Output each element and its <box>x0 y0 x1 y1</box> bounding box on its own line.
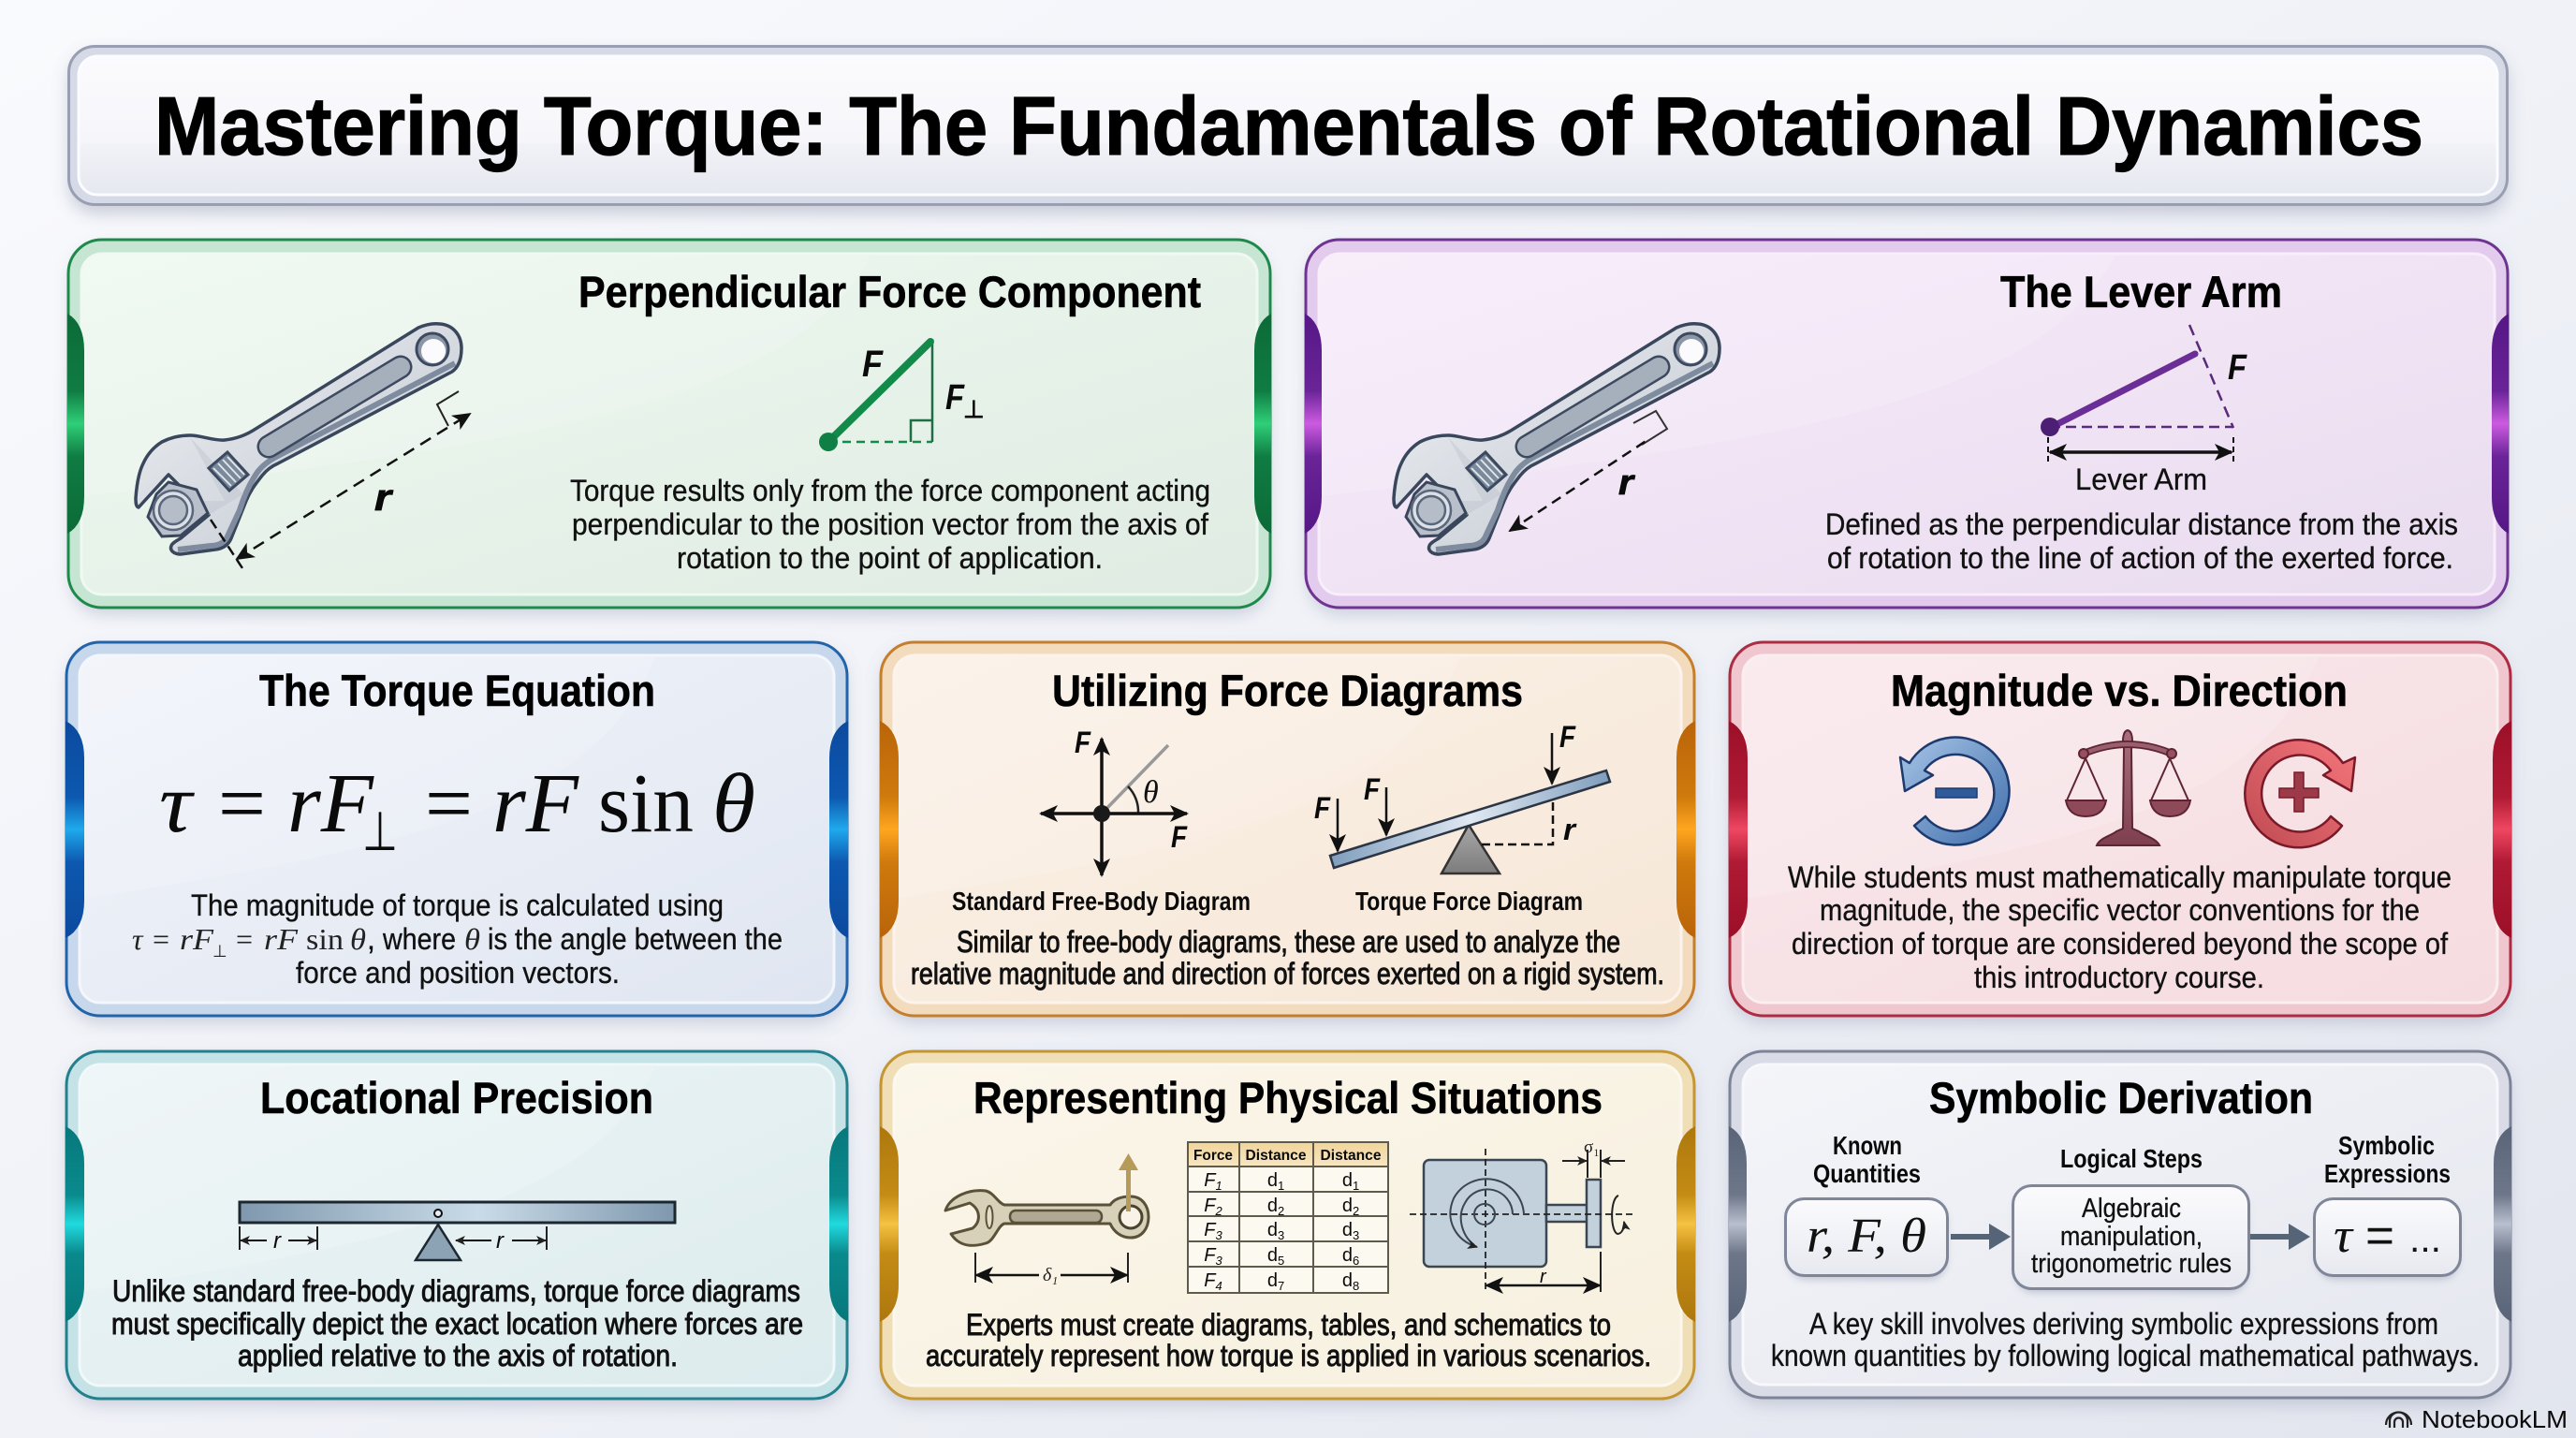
panel: the torque equation <box>66 642 848 1022</box>
table: 1 <box>1353 1179 1359 1193</box>
description <box>1825 507 2458 575</box>
icon: counterclockwise minus <box>1900 738 2010 845</box>
arrow <box>2250 1224 2310 1250</box>
flow: logical steps: trigonometric rules <box>2031 1249 2232 1279</box>
description <box>570 474 1210 575</box>
flow: known quantities: Known <box>1833 1131 1902 1160</box>
flow: symbolic expressions: Symbolic <box>2338 1131 2435 1160</box>
description: , <box>367 922 375 956</box>
flow: logical steps: Algebraic <box>2082 1194 2181 1224</box>
description: While students must mathematically manipulate torque <box>1788 860 2452 894</box>
description: = <box>236 922 253 956</box>
description: Defined as the perpendicular distance from the axis <box>1825 507 2458 541</box>
diagram: force triangle <box>819 339 985 451</box>
table: F <box>1204 1270 1215 1291</box>
icon: wrench with r: r <box>374 477 394 519</box>
table: 3 <box>1278 1228 1284 1242</box>
schematic: rotating shaft: r <box>1540 1267 1547 1287</box>
flow: symbolic expressions: = <box>2365 1209 2394 1263</box>
equation: ⊥ <box>362 801 398 862</box>
description: θ <box>464 922 480 956</box>
diagram: standard free-body: θ <box>1143 775 1159 810</box>
equation: = <box>425 757 473 850</box>
flow: logical steps: Logical Steps <box>2060 1144 2203 1173</box>
description: relative magnitude and direction of forces exerted on a rigid system. <box>911 957 1664 990</box>
diagram: torque force seesaw <box>1314 720 1610 916</box>
flow: known quantities <box>1786 1131 1947 1280</box>
diagram: lever arm: F <box>2228 348 2248 388</box>
title: Mastering Torque: The Fundamentals of Rotational Dynamics <box>154 80 2423 172</box>
panel: magnitude vs direction <box>1729 642 2511 1022</box>
diagram: force triangle: ⊥ <box>963 395 985 423</box>
table: 8 <box>1353 1279 1359 1293</box>
table: F <box>1204 1245 1215 1266</box>
description: rF <box>180 922 214 956</box>
table: 3 <box>1215 1254 1222 1268</box>
table: d <box>1267 1170 1278 1191</box>
diagram: force triangle: F <box>945 378 966 418</box>
description <box>911 925 1664 990</box>
diagram: standard free-body: F <box>1075 726 1091 759</box>
heading: Representing Physical Situations <box>973 1073 1603 1123</box>
heading: Symbolic Derivation <box>1929 1073 2313 1123</box>
icon: wrench with r <box>136 324 470 571</box>
description: direction of torque are considered beyond the scope of <box>1792 927 2448 961</box>
diagram: beam with pivot: r <box>496 1228 505 1254</box>
table: 6 <box>1353 1254 1359 1268</box>
description <box>1771 1307 2480 1372</box>
table: d <box>1342 1270 1353 1291</box>
table: d <box>1342 1196 1353 1216</box>
schematic: rotating shaft <box>1410 1137 1633 1292</box>
heading: Perpendicular Force Component <box>578 267 1201 316</box>
diagram: torque force seesaw: F <box>1559 720 1576 754</box>
icon: spanner with force arrow <box>945 1153 1149 1285</box>
description: this introductory course. <box>1974 961 2264 994</box>
diagram: standard free-body: F <box>1171 820 1188 854</box>
flow: symbolic expressions: Expressions <box>2324 1159 2451 1188</box>
description: of rotation to the line of action of the exerted force. <box>1827 541 2453 575</box>
panel: symbolic derivation <box>1729 1051 2511 1404</box>
description: Torque results only from the force component acting <box>570 474 1210 507</box>
icon: clockwise plus <box>2245 740 2355 847</box>
table: d <box>1342 1220 1353 1240</box>
icon: spanner with force arrow: δ₁ <box>1043 1265 1058 1285</box>
panel: the lever arm <box>1305 240 2509 614</box>
panel: utilizing force diagrams <box>880 642 1695 1022</box>
icon: wrench with r: r <box>1618 463 1635 503</box>
description: rotation to the point of application. <box>677 541 1103 575</box>
table: 3 <box>1215 1228 1222 1242</box>
diagram: torque force seesaw: Torque Force Diagram <box>1355 887 1583 916</box>
diagram: lever arm <box>2041 325 2248 496</box>
description: known quantities by following logical mathematical pathways. <box>1771 1339 2480 1372</box>
diagram: torque force seesaw: F <box>1314 791 1331 825</box>
table: 3 <box>1353 1228 1359 1242</box>
flow: symbolic expressions <box>2314 1131 2460 1280</box>
description <box>1788 860 2452 994</box>
description: ⊥ <box>212 942 227 961</box>
description: rF <box>264 922 299 956</box>
description <box>926 1308 1651 1372</box>
heading: The Lever Arm <box>2000 267 2282 316</box>
table: d <box>1267 1245 1278 1266</box>
description: must specifically depict the exact location where forces are <box>111 1307 803 1341</box>
table: 5 <box>1278 1254 1284 1268</box>
description: = <box>153 922 169 956</box>
table: 2 <box>1278 1204 1284 1218</box>
icon: wrench with r <box>1394 324 1720 554</box>
icon: balance scale <box>2066 730 2190 845</box>
diagram: lever arm: Lever Arm <box>2075 462 2207 496</box>
description: magnitude, the specific vector conventions for the <box>1820 893 2420 927</box>
table: 1 <box>1278 1179 1284 1193</box>
diagram: torque force seesaw: F <box>1364 772 1381 806</box>
description: applied relative to the axis of rotation. <box>238 1339 678 1372</box>
heading: Utilizing Force Diagrams <box>1052 666 1523 715</box>
heading: Magnitude vs. Direction <box>1891 666 2348 715</box>
heading: The Torque Equation <box>259 666 655 715</box>
watermark: NotebookLM: NotebookLM <box>2422 1405 2568 1433</box>
description: Unlike standard free-body diagrams, torque force diagrams <box>112 1274 800 1308</box>
equation: = <box>218 757 266 850</box>
table: 7 <box>1278 1279 1284 1293</box>
diagram: force triangle: F <box>862 344 884 385</box>
equation: sin <box>598 757 694 850</box>
flow: logical steps <box>2012 1144 2248 1293</box>
diagram: standard free-body: Standard Free-Body Diagram <box>952 887 1251 916</box>
flow: known quantities: Quantities <box>1813 1159 1921 1188</box>
description <box>111 1274 803 1372</box>
flow: logical steps: manipulation, <box>2060 1222 2203 1252</box>
description: where <box>382 922 456 956</box>
description: Similar to free-body diagrams, these are used to analyze the <box>957 925 1620 959</box>
table: F <box>1204 1196 1215 1216</box>
table: 2 <box>1353 1204 1359 1218</box>
description: A key skill involves deriving symbolic expressions from <box>1809 1307 2438 1341</box>
table: 2 <box>1214 1204 1222 1218</box>
description: The magnitude of torque is calculated using <box>191 888 724 922</box>
table: 1 <box>1215 1179 1222 1193</box>
equation: θ <box>712 757 755 850</box>
equation: rF <box>492 757 579 850</box>
description <box>132 888 783 990</box>
table: F <box>1204 1220 1215 1240</box>
arrow <box>1951 1224 2011 1250</box>
heading: Locational Precision <box>260 1073 653 1123</box>
description: perpendicular to the position vector from the axis of <box>572 507 1208 541</box>
description: force and position vectors. <box>296 956 620 990</box>
diagram: beam with pivot: r <box>273 1228 282 1254</box>
diagram: standard free-body <box>952 726 1251 916</box>
table: 4 <box>1215 1279 1222 1293</box>
description: accurately represent how torque is applied in various scenarios. <box>926 1339 1651 1372</box>
description: θ <box>350 922 366 956</box>
flow: symbolic expressions: τ <box>2334 1210 2355 1263</box>
equation: rF <box>287 757 374 850</box>
title banner <box>69 47 2507 213</box>
table: F <box>1204 1170 1215 1191</box>
panel: representing physical situations <box>880 1051 1695 1404</box>
schematic: rotating shaft: σ₁ <box>1584 1137 1600 1157</box>
table <box>1188 1142 1388 1293</box>
table: Distance <box>1320 1148 1382 1164</box>
diagram: torque force seesaw: r <box>1563 813 1577 846</box>
table: d <box>1342 1245 1353 1266</box>
description: sin <box>306 922 344 956</box>
description: is the angle between the <box>488 922 783 956</box>
table: d <box>1267 1270 1278 1291</box>
table: d <box>1342 1170 1353 1191</box>
table: Force <box>1193 1148 1233 1164</box>
panel: locational precision <box>66 1051 848 1404</box>
table: d <box>1267 1196 1278 1216</box>
description: Experts must create diagrams, tables, and schematics to <box>966 1308 1611 1342</box>
flow: known quantities: r, F, θ <box>1807 1210 1926 1263</box>
equation <box>159 757 755 862</box>
description: τ <box>132 922 144 956</box>
flow: symbolic expressions: ... <box>2409 1219 2441 1260</box>
table: d <box>1267 1220 1278 1240</box>
table: Distance <box>1245 1148 1307 1164</box>
equation: τ <box>159 757 195 850</box>
diagram: beam with pivot <box>240 1202 675 1260</box>
panel: perpendicular force component <box>67 240 1271 614</box>
